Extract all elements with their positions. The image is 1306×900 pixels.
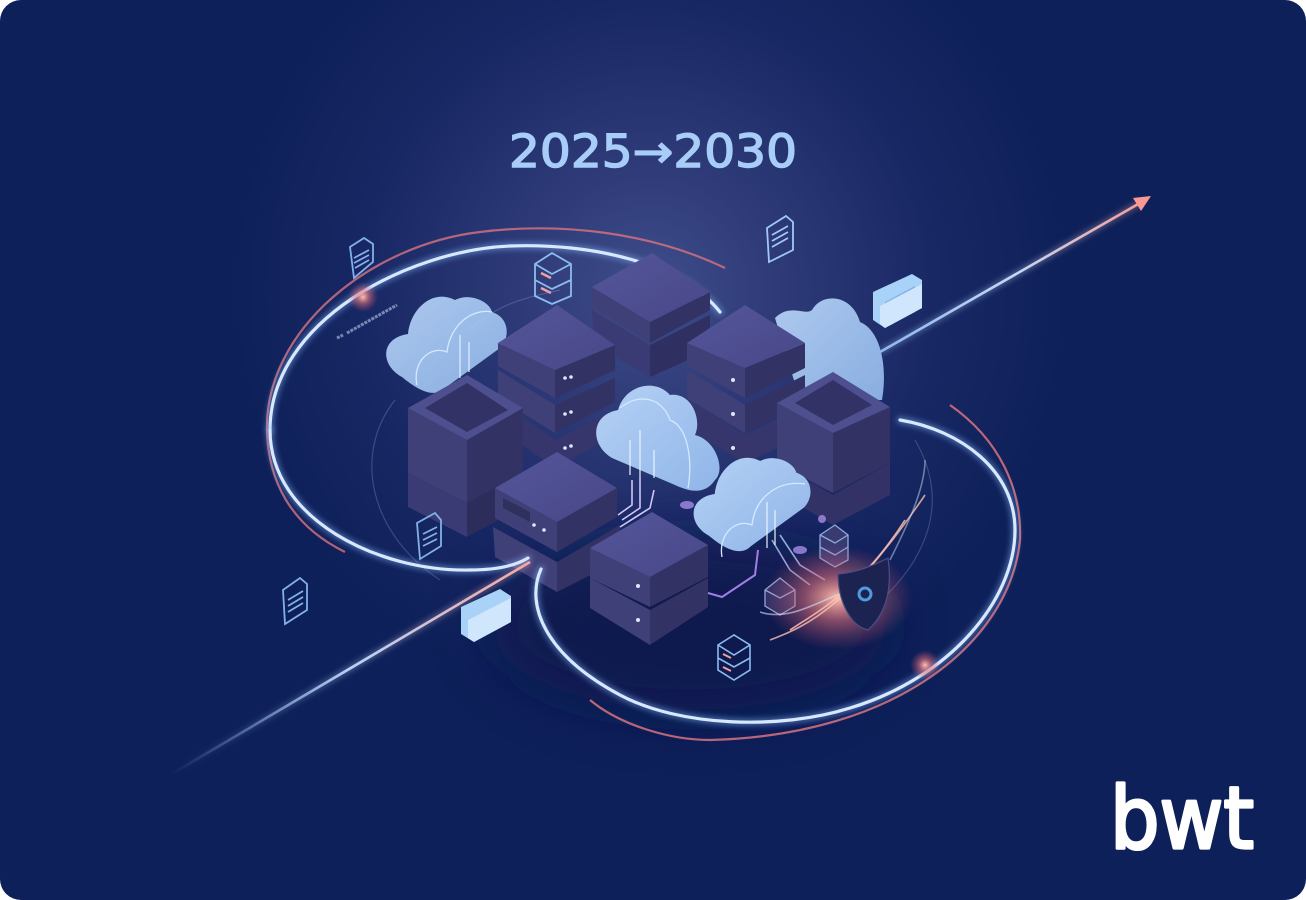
icon: database, bottom xyxy=(718,635,750,680)
orbit node, lower right xyxy=(910,650,940,680)
title: 2025→2030 xyxy=(509,125,797,178)
server stack: upper right xyxy=(687,305,805,463)
icon: document, top right xyxy=(767,216,793,262)
shield glow xyxy=(767,549,910,648)
server box: left tall xyxy=(408,375,523,537)
cloud: back right xyxy=(775,298,884,400)
logo: bwt xyxy=(1110,769,1254,869)
arrow: lower left segment xyxy=(170,562,530,775)
icon: document, top left xyxy=(350,238,373,278)
energy streaks xyxy=(760,460,925,640)
icon: database, top xyxy=(535,253,571,304)
cloud: lower right xyxy=(694,458,811,557)
arrow: upper right segment with head xyxy=(880,196,1151,352)
red outer orbit, upper left xyxy=(267,228,725,552)
icon: document, lower left xyxy=(417,513,441,559)
red outer orbit, lower right xyxy=(590,405,1020,740)
orbit node, upper left xyxy=(348,282,378,312)
cloud: upper left xyxy=(386,297,507,393)
server stack: front center xyxy=(590,512,708,645)
glowing orbit, lower right xyxy=(536,420,1015,722)
purple data chips xyxy=(680,501,826,554)
server stack: top middle xyxy=(592,253,710,377)
glowing orbit, lower left xyxy=(270,430,528,570)
floor shadow xyxy=(490,540,890,710)
tiny data label xyxy=(337,305,397,338)
glowing orbit, upper left xyxy=(270,246,720,430)
icon: database, lower right xyxy=(820,525,848,567)
server box: right tall xyxy=(777,372,890,525)
faint orbit rings xyxy=(372,290,932,610)
icon: database, center lower xyxy=(765,578,795,615)
server stack: upper left xyxy=(498,305,615,468)
icon: folder, right xyxy=(873,274,922,328)
icon: shield xyxy=(838,558,889,630)
circuit lines xyxy=(618,478,825,597)
icon: document, far lower left xyxy=(283,578,307,624)
icon: folder, lower xyxy=(461,589,511,642)
server stack: front left xyxy=(493,452,620,592)
cloud: center xyxy=(596,386,720,491)
